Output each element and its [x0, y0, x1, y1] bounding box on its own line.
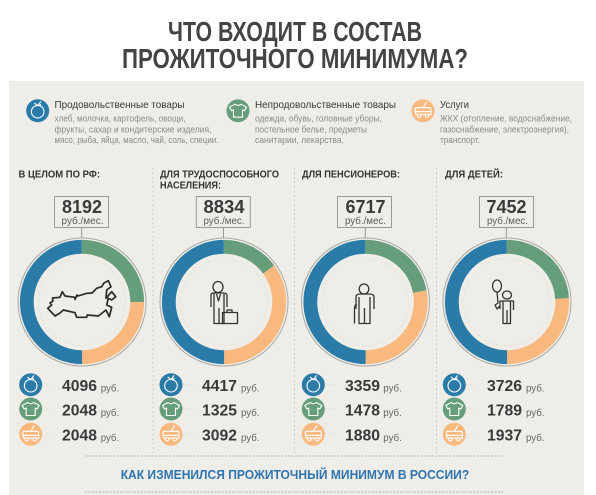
donut chart	[160, 238, 288, 366]
value box: 8192	[62, 197, 102, 217]
breakdown rows: руб.	[383, 407, 402, 419]
breakdown rows: руб.	[101, 407, 119, 419]
icon: shirt	[226, 99, 250, 122]
breakdown rows: руб.	[526, 407, 544, 419]
icon: apple	[26, 99, 49, 122]
value box: руб./мес.	[204, 215, 244, 227]
heading: ДЛЯ ПЕНСИОНЕРОВ:	[302, 169, 400, 181]
breakdown rows	[19, 373, 119, 446]
breakdown rows: 3726	[487, 378, 522, 395]
value box	[196, 196, 250, 228]
legend: non-food: санитарии, лекарства.	[255, 135, 344, 145]
legend: services: транспорт.	[440, 135, 480, 145]
breakdown rows	[160, 373, 260, 446]
breakdown rows: руб.	[383, 432, 402, 444]
icon: apple	[443, 373, 466, 396]
breakdown rows: руб.	[383, 382, 402, 394]
icon: trolleybus	[412, 99, 434, 122]
legend: non-food: одежда, обувь, головные уборы,	[255, 114, 382, 124]
value box: 8834	[204, 197, 244, 217]
icon: apple	[160, 373, 182, 396]
title: ЧТО ВХОДИТ В СОСТАВ	[168, 16, 422, 47]
value box	[338, 196, 392, 228]
column: working-age	[160, 169, 288, 446]
breakdown rows: руб.	[241, 407, 260, 419]
legend: food: фрукты, сахар и кондитерские изделия,	[54, 124, 212, 134]
breakdown rows: руб.	[101, 382, 119, 394]
legend: services: ЖКХ (отопление, водоснабжение,	[440, 114, 572, 124]
legend: food: Продовольственные товары	[54, 99, 184, 111]
value box	[54, 196, 108, 228]
breakdown rows: 3092	[202, 427, 237, 444]
value box: 6717	[346, 197, 386, 217]
legend: services: Услуги	[440, 99, 469, 111]
title: ПРОЖИТОЧНОГО МИНИМУМА?	[122, 43, 468, 74]
icon: apple	[19, 373, 42, 396]
breakdown rows: 1789	[487, 402, 522, 419]
donut chart	[302, 238, 430, 366]
breakdown rows: 1325	[202, 402, 237, 419]
breakdown rows: 1880	[345, 427, 380, 444]
breakdown rows: руб.	[526, 432, 544, 444]
legend: non-food: Непродовольственные товары	[255, 99, 396, 111]
icon: trolleybus	[302, 423, 325, 446]
breakdown rows: руб.	[526, 382, 544, 394]
icon: map of Russia	[48, 281, 116, 317]
value box	[480, 196, 534, 228]
column: Russia overall	[18, 169, 146, 446]
column: children	[443, 168, 571, 446]
donut chart	[443, 238, 571, 366]
heading: В ЦЕЛОМ ПО РФ:	[18, 169, 100, 181]
breakdown rows: 4096	[62, 378, 97, 395]
legend: services: газоснабжение, электроэнергия),	[440, 124, 569, 134]
icon: trolleybus	[19, 423, 42, 446]
value box: 7452	[486, 197, 526, 217]
breakdown rows	[443, 373, 544, 446]
breakdown rows: 1478	[345, 402, 380, 419]
icon: trolleybus	[160, 423, 182, 446]
value box: руб./мес.	[345, 215, 386, 227]
donut chart	[18, 238, 146, 366]
legend: services	[412, 99, 572, 145]
breakdown rows: 3359	[345, 378, 380, 395]
icon: apple	[302, 373, 325, 396]
breakdown rows: 2048	[62, 402, 97, 419]
icon: shirt	[302, 398, 325, 420]
breakdown rows: руб.	[241, 432, 260, 444]
breakdown rows: руб.	[101, 432, 119, 444]
legend: food	[26, 99, 219, 145]
title	[122, 16, 468, 74]
legend: non-food	[226, 99, 396, 145]
icon: shirt	[160, 398, 182, 420]
breakdown rows: 1937	[487, 427, 522, 444]
footer link heading: КАК ИЗМЕНИЛСЯ ПРОЖИТОЧНЫЙ МИНИМУМ В РОССИИ?	[121, 467, 469, 482]
icon: pensioner with cane	[354, 284, 374, 324]
value box: руб./мес.	[487, 215, 528, 227]
heading: ДЛЯ ТРУДОСПОСОБНОГО	[160, 169, 279, 181]
heading: ДЛЯ ДЕТЕЙ:	[445, 168, 503, 181]
icon: shirt	[19, 398, 42, 420]
legend: food: хлеб, молочка, картофель, овощи,	[54, 114, 186, 124]
legend: non-food: постельное белье, предметы	[255, 124, 367, 134]
icon: trolleybus	[443, 423, 466, 446]
column: pensioners	[302, 169, 430, 446]
icon: worker with briefcase	[211, 282, 238, 324]
value box: руб./мес.	[62, 215, 104, 227]
breakdown rows: руб.	[241, 382, 260, 394]
icon: child with balloon	[492, 280, 514, 324]
breakdown rows	[302, 373, 402, 446]
breakdown rows: 2048	[62, 427, 97, 444]
breakdown rows: 4417	[202, 378, 237, 395]
legend: food: мясо, рыба, яйца, масло, чай, соль, специи.	[54, 135, 218, 145]
icon: shirt	[443, 398, 466, 420]
column: working-age: НАСЕЛЕНИЯ:	[160, 179, 221, 191]
